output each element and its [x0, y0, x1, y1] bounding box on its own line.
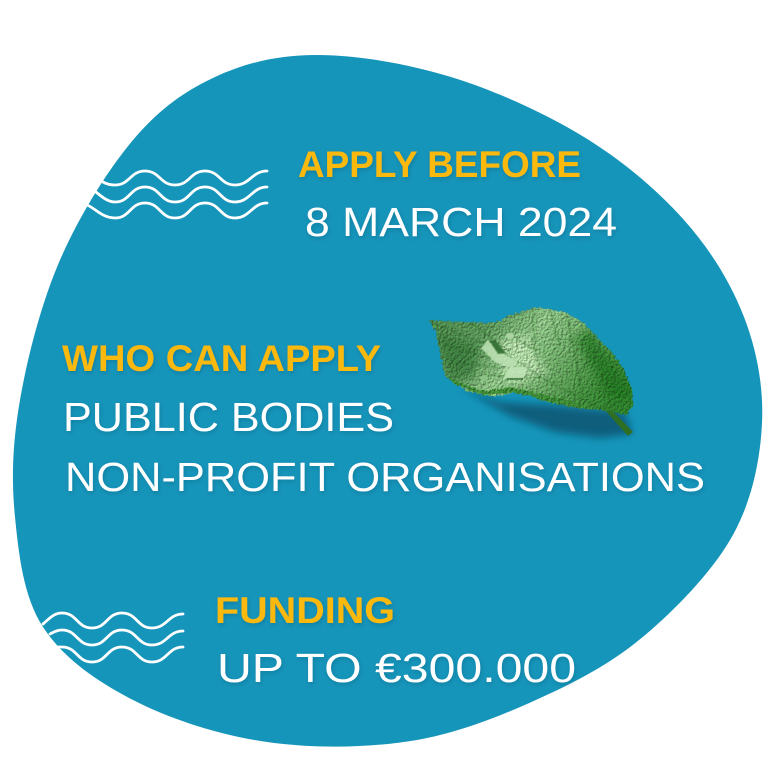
text: funding amount: UP TO €300.000 — [217, 645, 576, 691]
heading: funding: FUNDING — [215, 590, 395, 631]
icon: top waves — [87, 171, 267, 218]
heading: apply before: APPLY BEFORE — [298, 144, 581, 185]
icon: leaf — [429, 307, 634, 438]
text: public bodies: PUBLIC BODIES — [63, 394, 394, 440]
text: non-profit organisations: NON-PROFIT ORGANISATIONS — [65, 454, 705, 500]
icon: bottom waves — [43, 613, 183, 662]
text: deadline: 8 MARCH 2024 — [305, 199, 617, 245]
heading: who can apply: WHO CAN APPLY — [62, 338, 381, 379]
